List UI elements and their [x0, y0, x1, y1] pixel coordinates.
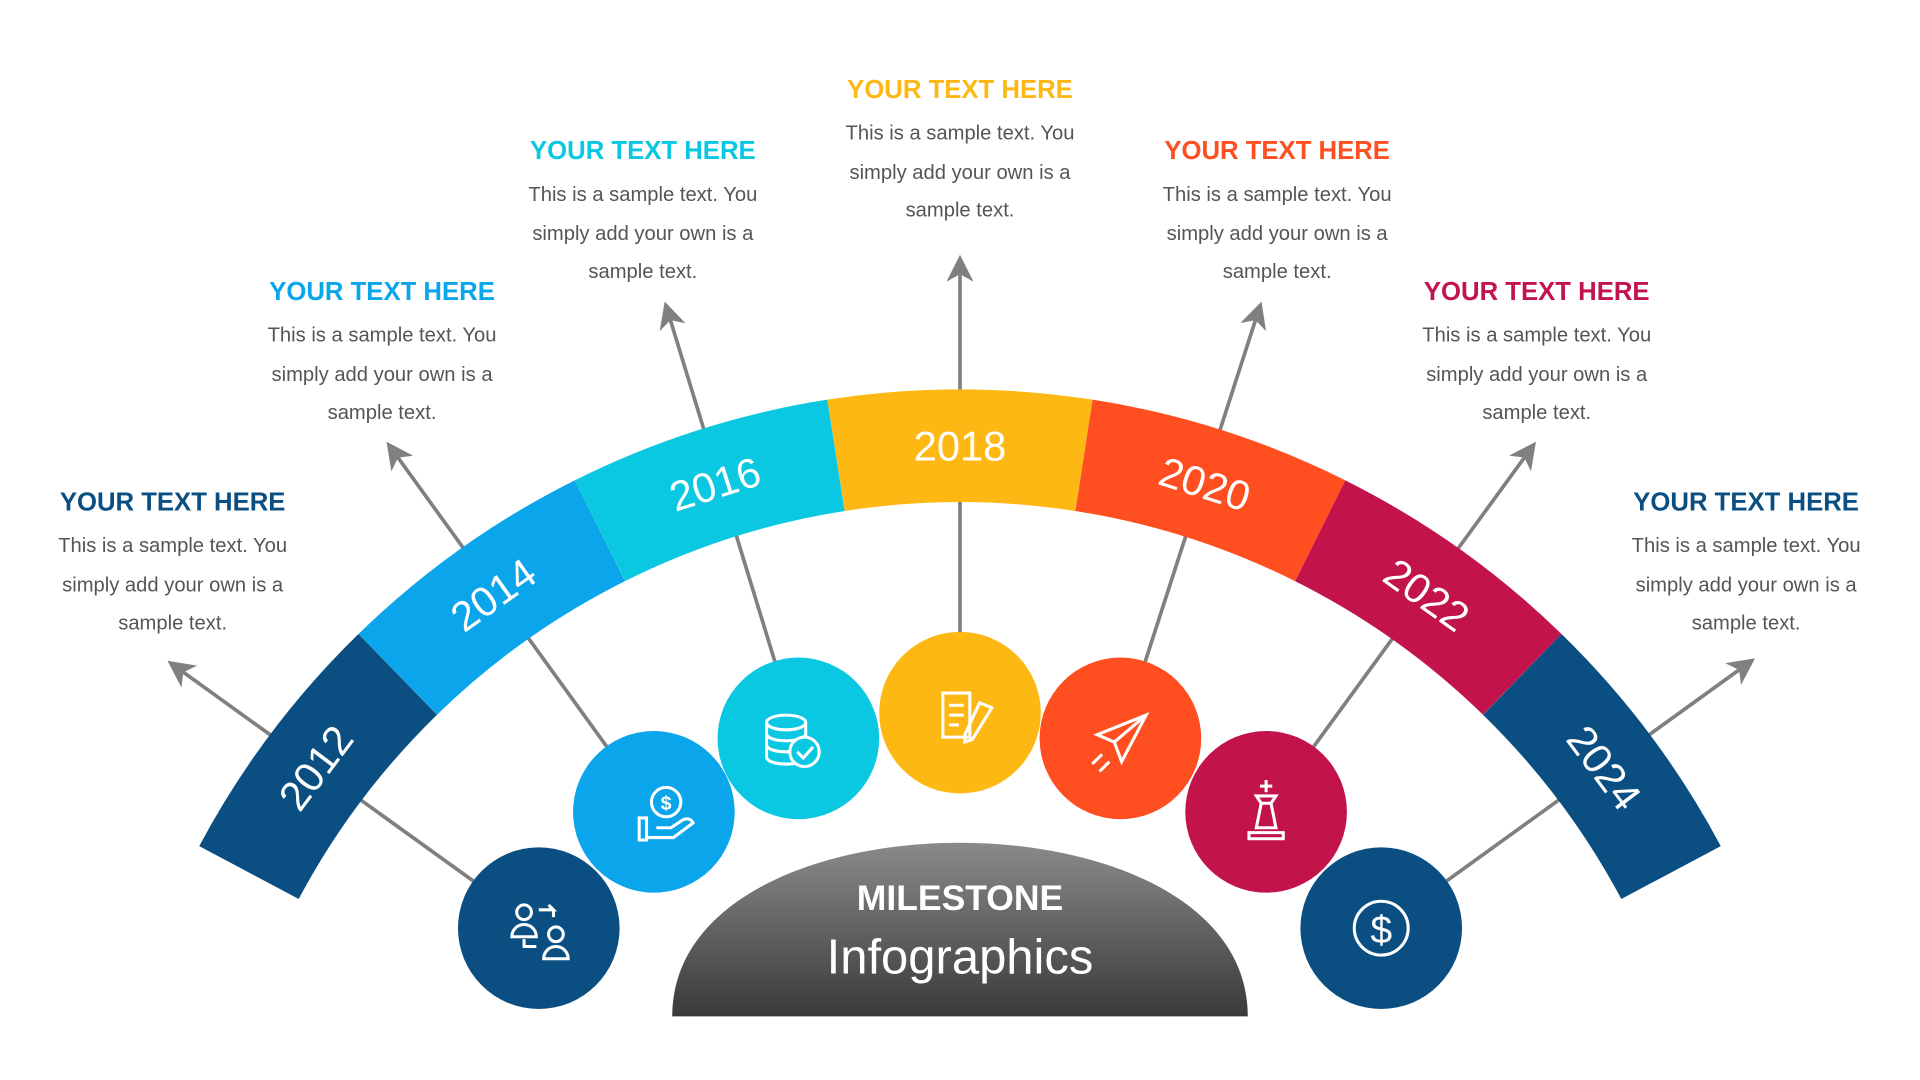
segment 2020: 2020 [1154, 448, 1256, 521]
text block 2014: sample text. [328, 402, 436, 424]
icon circles [458, 632, 1462, 1009]
icon: database check [718, 658, 879, 819]
text block 2012 [58, 489, 287, 634]
text blocks [58, 76, 1861, 634]
icon: dollar coin: $ [1370, 909, 1392, 952]
text block 2012: YOUR TEXT HERE [60, 489, 285, 517]
segment 2014: 2014 [442, 549, 545, 641]
icon: people exchange [458, 847, 620, 1009]
center dome: milestone infographics: MILESTONE [857, 878, 1063, 918]
text block 2014: This is a sample text. You [268, 325, 497, 347]
text block 2020 [1163, 137, 1392, 283]
segment 2022 [1281, 472, 1567, 725]
text block 2012: sample text. [118, 612, 227, 634]
text block 2012: This is a sample text. You [58, 535, 287, 557]
connector lines with arrows [171, 260, 1751, 928]
text block 2018: sample text. [906, 200, 1014, 222]
text block 2020: simply add your own is a [1167, 223, 1388, 245]
text block 2024: YOUR TEXT HERE [1633, 489, 1859, 517]
segment 2014 [353, 472, 639, 725]
segment 2012: 2012 [269, 717, 362, 819]
icon: document pen [879, 632, 1041, 793]
segment 2018 [827, 389, 1093, 511]
segment 2020 [1059, 390, 1348, 586]
text block 2016: This is a sample text. You [528, 184, 757, 206]
text block 2022: This is a sample text. You [1422, 325, 1651, 347]
center dome: milestone infographics: Infographics [827, 930, 1093, 984]
text block 2018: YOUR TEXT HERE [847, 76, 1073, 104]
text block 2012: simply add your own is a [62, 574, 284, 596]
segment 2024: 2024 [1558, 717, 1651, 819]
center dome: milestone infographics [672, 843, 1248, 1016]
text block 2016: sample text. [588, 261, 697, 283]
segment 2016: 2016 [664, 448, 766, 521]
segment 2024 [1473, 628, 1729, 913]
text block 2018 [846, 76, 1074, 222]
text block 2024: simply add your own is a [1636, 574, 1857, 596]
text block 2016 [528, 137, 757, 283]
text block 2016: simply add your own is a [532, 223, 754, 245]
text block 2020: This is a sample text. You [1163, 184, 1392, 206]
text block 2014 [268, 278, 497, 424]
text block 2016: YOUR TEXT HERE [530, 137, 756, 165]
text block 2014: simply add your own is a [272, 364, 493, 386]
text block 2014: YOUR TEXT HERE [269, 278, 495, 306]
text block 2024 [1632, 489, 1861, 634]
text block 2018: simply add your own is a [849, 162, 1071, 184]
text block 2022: YOUR TEXT HERE [1424, 278, 1650, 306]
arc segments [191, 389, 1729, 913]
text block 2020: sample text. [1223, 261, 1332, 283]
segment 2018: 2018 [914, 422, 1006, 469]
text block 2024: sample text. [1692, 612, 1801, 634]
icon: paper plane [1040, 658, 1201, 819]
segment 2016 [572, 390, 861, 586]
icon: dollar coin [1300, 847, 1462, 1009]
icon: money hand [573, 731, 735, 893]
segment 2012 [191, 628, 447, 913]
text block 2022 [1422, 278, 1651, 424]
text block 2018: This is a sample text. You [846, 123, 1074, 145]
text block 2022: simply add your own is a [1426, 364, 1648, 386]
text block 2020: YOUR TEXT HERE [1164, 137, 1390, 165]
text block 2022: sample text. [1482, 402, 1591, 424]
segment 2022: 2022 [1375, 549, 1478, 641]
icon: money hand: $ [661, 792, 672, 814]
text block 2024: This is a sample text. You [1632, 535, 1861, 557]
icon: chess king [1185, 731, 1347, 893]
